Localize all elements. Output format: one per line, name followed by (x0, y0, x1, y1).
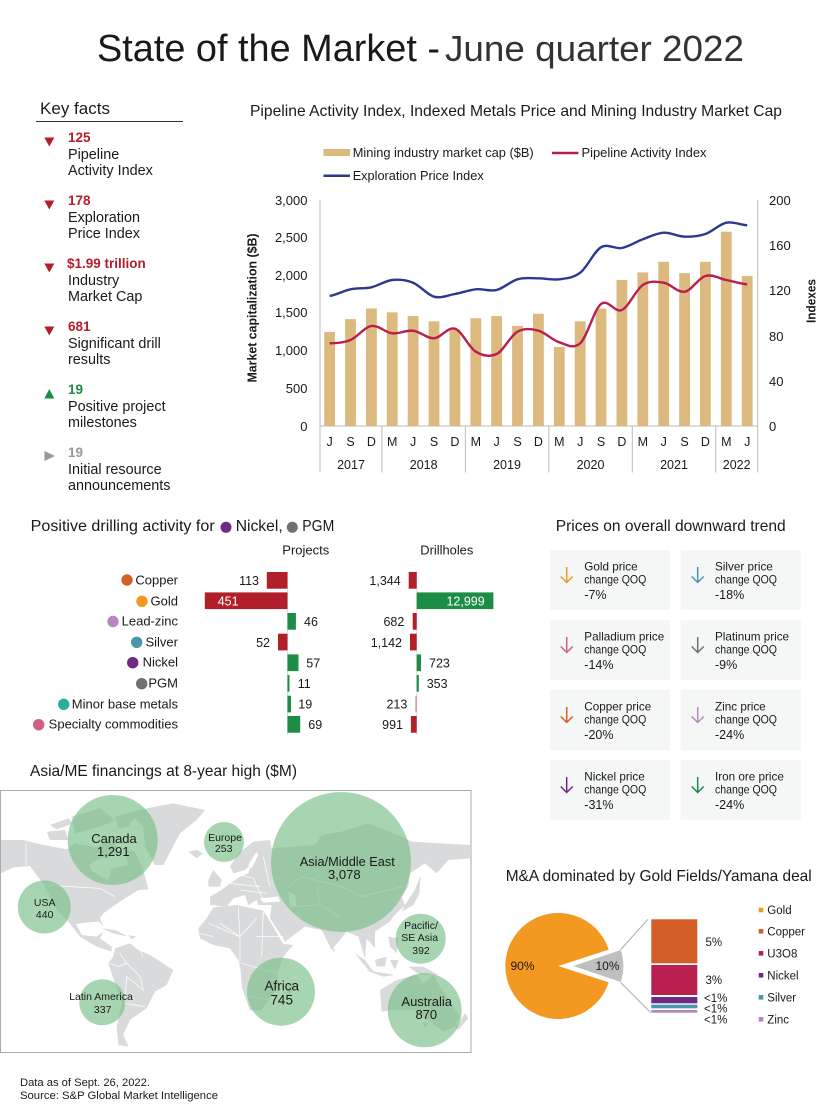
card: platinum: change QOQ (715, 644, 777, 656)
fact: initial resource announcements: Initial resource (68, 462, 162, 478)
bubble: Africa (247, 958, 315, 1026)
bubble: Australia (388, 973, 462, 1047)
fact: pipeline activity index: 125 (68, 130, 91, 145)
drilling heading: Nickel, (236, 518, 283, 535)
pie chart (505, 913, 623, 1019)
title: June quarter 2022 (445, 28, 744, 69)
month labels: M (471, 435, 481, 449)
commodity labels with dots: Copper (135, 572, 179, 588)
projects values: 11 (298, 677, 311, 691)
month labels: D (534, 435, 543, 449)
drillholes values: 353 (427, 677, 448, 691)
fact: exploration price index (44, 193, 141, 242)
bubble: Pacific/SE Asia (396, 914, 446, 964)
fact: industry market cap: Market Cap (68, 289, 142, 305)
year labels (337, 458, 751, 472)
card: palladium: change QOQ (584, 644, 646, 656)
card: platinum: -9% (715, 658, 737, 672)
card: silver (681, 550, 801, 610)
left axis labels: 3,000 (275, 193, 308, 208)
bubble: Latin America (69, 979, 133, 1025)
drillholes values: 12,999 (446, 594, 485, 608)
left axis labels: 2,000 (275, 268, 308, 283)
projects values: 451 (218, 594, 239, 608)
month labels: S (680, 435, 689, 449)
month labels: D (367, 435, 376, 449)
drillholes values: 682 (383, 615, 404, 629)
bubble: Latin America: Latin America (69, 991, 133, 1003)
stacked bar labels: 5% (706, 937, 722, 949)
fact: pipeline activity index (44, 130, 154, 179)
card: gold: -7% (584, 588, 607, 602)
bubble: Europe (204, 822, 244, 862)
commodity labels with dots: PGM (148, 676, 178, 690)
card: platinum (681, 620, 801, 680)
projects values: 113 (239, 574, 259, 588)
bubble: Africa: Africa (264, 978, 299, 994)
chart legend: Pipeline Activity Index (582, 145, 707, 160)
projects values (218, 574, 322, 732)
fact: initial resource announcements (44, 445, 170, 494)
month labels: D (450, 435, 459, 449)
heading: key facts: Key facts (40, 100, 110, 118)
panel: prices (550, 518, 801, 820)
card: copper (550, 690, 670, 750)
fact: positive project milestones: milestones (68, 415, 137, 431)
column headers: Projects (282, 544, 329, 558)
left axis labels: 1,000 (275, 343, 308, 358)
column headers: Drillholes (420, 544, 473, 558)
bubble: Pacific/SE Asia: SE Asia (401, 932, 438, 944)
axis title: indexes: Indexes (804, 279, 818, 323)
projects values: 46 (304, 615, 318, 629)
card: copper: change QOQ (584, 714, 646, 726)
card: nickel (550, 760, 670, 820)
fact: pipeline activity index: Pipeline (68, 147, 119, 163)
year labels: 2019 (493, 458, 521, 472)
line: exploration price index (330, 222, 747, 297)
title: State of the Market - (97, 28, 440, 70)
right axis labels: 40 (769, 374, 783, 389)
bubble: USA (18, 880, 71, 934)
bubble: USA: USA (34, 897, 55, 909)
card: iron ore: change QOQ (715, 784, 777, 796)
fact: initial resource announcements: 19 (68, 445, 83, 460)
panel: positive drilling activity (31, 518, 493, 735)
M&A legend: Nickel (767, 970, 799, 982)
projects values: 57 (306, 656, 320, 670)
drilling heading (31, 518, 334, 535)
stacked bar labels: <1% (704, 1014, 727, 1026)
right axis labels: 200 (769, 193, 791, 208)
bubble: Latin America: 337 (94, 1004, 112, 1016)
card: palladium: -14% (584, 658, 613, 672)
month labels (326, 435, 750, 449)
fact: significant drill results (44, 319, 161, 368)
drillholes bars (409, 571, 493, 735)
drilling heading: PGM (302, 518, 334, 535)
fact: significant drill results: results (68, 352, 110, 368)
fact: initial resource announcements: announcements (68, 478, 170, 494)
bubble: Canada (68, 795, 158, 885)
right axis labels: 120 (769, 283, 791, 298)
bubble: Asia/Middle East (271, 792, 411, 932)
year labels: 2021 (660, 458, 688, 472)
stacked bar labels: <1% (704, 993, 727, 1005)
month labels: D (701, 435, 710, 449)
fact: industry market cap: Industry (68, 273, 120, 289)
map frame (0, 790, 471, 1052)
card: silver: Silver price (715, 560, 773, 574)
prices heading: Prices on overall downward trend (556, 518, 786, 535)
card: iron ore: -24% (715, 798, 744, 812)
card: platinum: Platinum price (715, 630, 789, 644)
card: copper: Copper price (584, 700, 651, 714)
month labels: D (617, 435, 626, 449)
month labels: S (346, 435, 355, 449)
projects bars (205, 571, 300, 735)
drilling heading: Positive drilling activity for (31, 518, 215, 535)
bubble: Asia/Middle East: 3,078 (328, 867, 361, 882)
month labels: J (661, 435, 667, 449)
drillholes values: 723 (429, 656, 450, 670)
right axis labels: 0 (769, 419, 776, 434)
chart legend: Mining industry market cap ($B) (353, 145, 534, 160)
stacked bar labels: 3% (706, 975, 722, 987)
left axis labels (275, 193, 308, 434)
drillholes values: 1,142 (371, 636, 402, 650)
map heading: Asia/ME financings at 8-year high ($M) (30, 763, 297, 780)
drillholes values: 213 (386, 698, 407, 712)
footer source note: Data as of Sept. 26, 2022. (20, 1077, 150, 1089)
fact: industry market cap (44, 256, 146, 305)
bubble: USA: 440 (36, 909, 54, 921)
panel: pipeline activity chart (246, 103, 818, 472)
card: gold (550, 550, 670, 610)
axis title: market capitalization: Market capitalization ($B) (246, 234, 260, 382)
drillholes values (369, 574, 485, 732)
column headers (282, 544, 473, 558)
month labels: J (326, 435, 333, 449)
bubble: Europe: 253 (215, 843, 233, 855)
pie chart: 90% (510, 959, 535, 973)
year labels: 2017 (337, 458, 365, 472)
month labels: S (513, 435, 522, 449)
fact: significant drill results: Significant drill (68, 336, 161, 352)
connector lines (621, 919, 651, 1013)
card: nickel: change QOQ (584, 784, 646, 796)
world map (1, 803, 470, 1047)
bubble: Australia: 870 (415, 1007, 437, 1022)
projects values: 52 (256, 636, 270, 650)
footer source note: Source: S&P Global Market Intelligence (20, 1090, 218, 1102)
panel: financings map (0, 763, 471, 1052)
fact: pipeline activity index: Activity Index (68, 163, 154, 179)
year labels: 2020 (577, 458, 604, 472)
month labels: J (577, 435, 583, 449)
chart legend (324, 145, 707, 183)
commodity labels with dots: Gold (151, 594, 178, 608)
card: zinc (681, 690, 801, 750)
chart legend: Exploration Price Index (353, 168, 484, 183)
card: nickel: -31% (584, 798, 613, 812)
drillholes values: 1,344 (369, 574, 401, 588)
bubble: Asia/Middle East: Asia/Middle East (300, 855, 395, 869)
M&A legend: U3O8 (767, 948, 797, 960)
left axis labels: 2,500 (275, 230, 308, 245)
fact: positive project milestones (44, 382, 166, 431)
fact: positive project milestones: Positive project (68, 399, 166, 415)
year labels: 2018 (410, 458, 438, 472)
card: palladium: Palladium price (584, 630, 664, 644)
month labels: J (493, 435, 500, 449)
month labels: J (410, 435, 416, 449)
drillholes values: 991 (382, 718, 403, 732)
line: pipeline activity index (330, 276, 747, 356)
left axis labels: 1,500 (275, 305, 308, 320)
commodity labels with dots (33, 572, 179, 732)
commodity labels with dots: Nickel (143, 654, 178, 670)
stacked bar labels: <1% (704, 1004, 727, 1016)
panel: key facts (36, 100, 183, 494)
panel: M&A (505, 868, 812, 1026)
stacked bar (651, 919, 697, 1013)
projects values: 69 (308, 718, 322, 732)
fact: significant drill results: 681 (68, 319, 91, 334)
stacked bar labels (704, 937, 727, 1026)
month labels: J (744, 435, 750, 449)
bubble: Africa: 745 (270, 992, 293, 1008)
month labels: S (597, 435, 605, 449)
fact: exploration price index: Exploration (68, 210, 140, 226)
fact: exploration price index: 178 (68, 193, 91, 208)
card: silver: change QOQ (715, 574, 777, 586)
card: zinc: -24% (715, 728, 744, 742)
commodity labels with dots: Specialty commodities (49, 716, 178, 732)
commodity labels with dots: Lead-zinc (122, 614, 178, 628)
fact: positive project milestones: 19 (68, 382, 83, 397)
month labels: M (554, 435, 565, 449)
card: nickel: Nickel price (584, 770, 645, 784)
bubble: Europe: Europe (208, 832, 242, 844)
M&A legend: Copper (767, 926, 805, 938)
M&A legend: Gold (767, 905, 792, 917)
M&A legend (759, 905, 805, 1026)
bars: market cap (324, 232, 753, 426)
M&A legend: Zinc (767, 1014, 789, 1026)
card: iron ore: Iron ore price (715, 770, 784, 784)
fact: industry market cap: $1.99 trillion (67, 256, 146, 271)
right axis labels (769, 193, 791, 434)
bubble: Canada: 1,291 (97, 844, 130, 859)
axis lines (320, 200, 758, 472)
commodity labels with dots: Minor base metals (72, 696, 178, 712)
card: zinc: change QOQ (715, 714, 777, 726)
card: copper: -20% (584, 728, 613, 742)
month labels: S (430, 435, 438, 449)
bubble: Pacific/SE Asia: Pacific/ (404, 920, 438, 932)
fact: exploration price index: Price Index (68, 226, 141, 242)
inland seas and borders (26, 843, 402, 1007)
left axis labels: 0 (300, 419, 308, 434)
month labels: M (387, 435, 397, 449)
year labels: 2022 (723, 458, 751, 472)
commodity labels with dots: Silver (145, 634, 179, 650)
card: palladium (550, 620, 670, 680)
pie chart: 10% (596, 959, 620, 973)
chart heading: Pipeline Activity Index, Indexed Metals Price and Mining Industry Market Cap (250, 103, 782, 120)
card: gold: Gold price (584, 560, 638, 574)
bubble: Canada: Canada (91, 831, 138, 846)
title (97, 28, 744, 70)
footer source note (20, 1077, 218, 1102)
bubble: Australia: Australia (401, 994, 453, 1009)
card: zinc: Zinc price (715, 700, 766, 714)
M&A heading: M&A dominated by Gold Fields/Yamana deal (506, 868, 812, 885)
bubble: Pacific/SE Asia: 392 (412, 945, 430, 957)
projects values: 19 (298, 698, 312, 712)
right axis labels: 80 (769, 329, 783, 344)
card: silver: -18% (715, 588, 744, 602)
card: gold: change QOQ (584, 574, 646, 586)
card: iron ore (681, 760, 801, 820)
left axis labels: 500 (286, 381, 308, 396)
M&A legend: Silver (767, 992, 796, 1004)
month labels: M (638, 435, 648, 449)
month labels: M (721, 435, 732, 449)
right axis labels: 160 (769, 238, 791, 253)
